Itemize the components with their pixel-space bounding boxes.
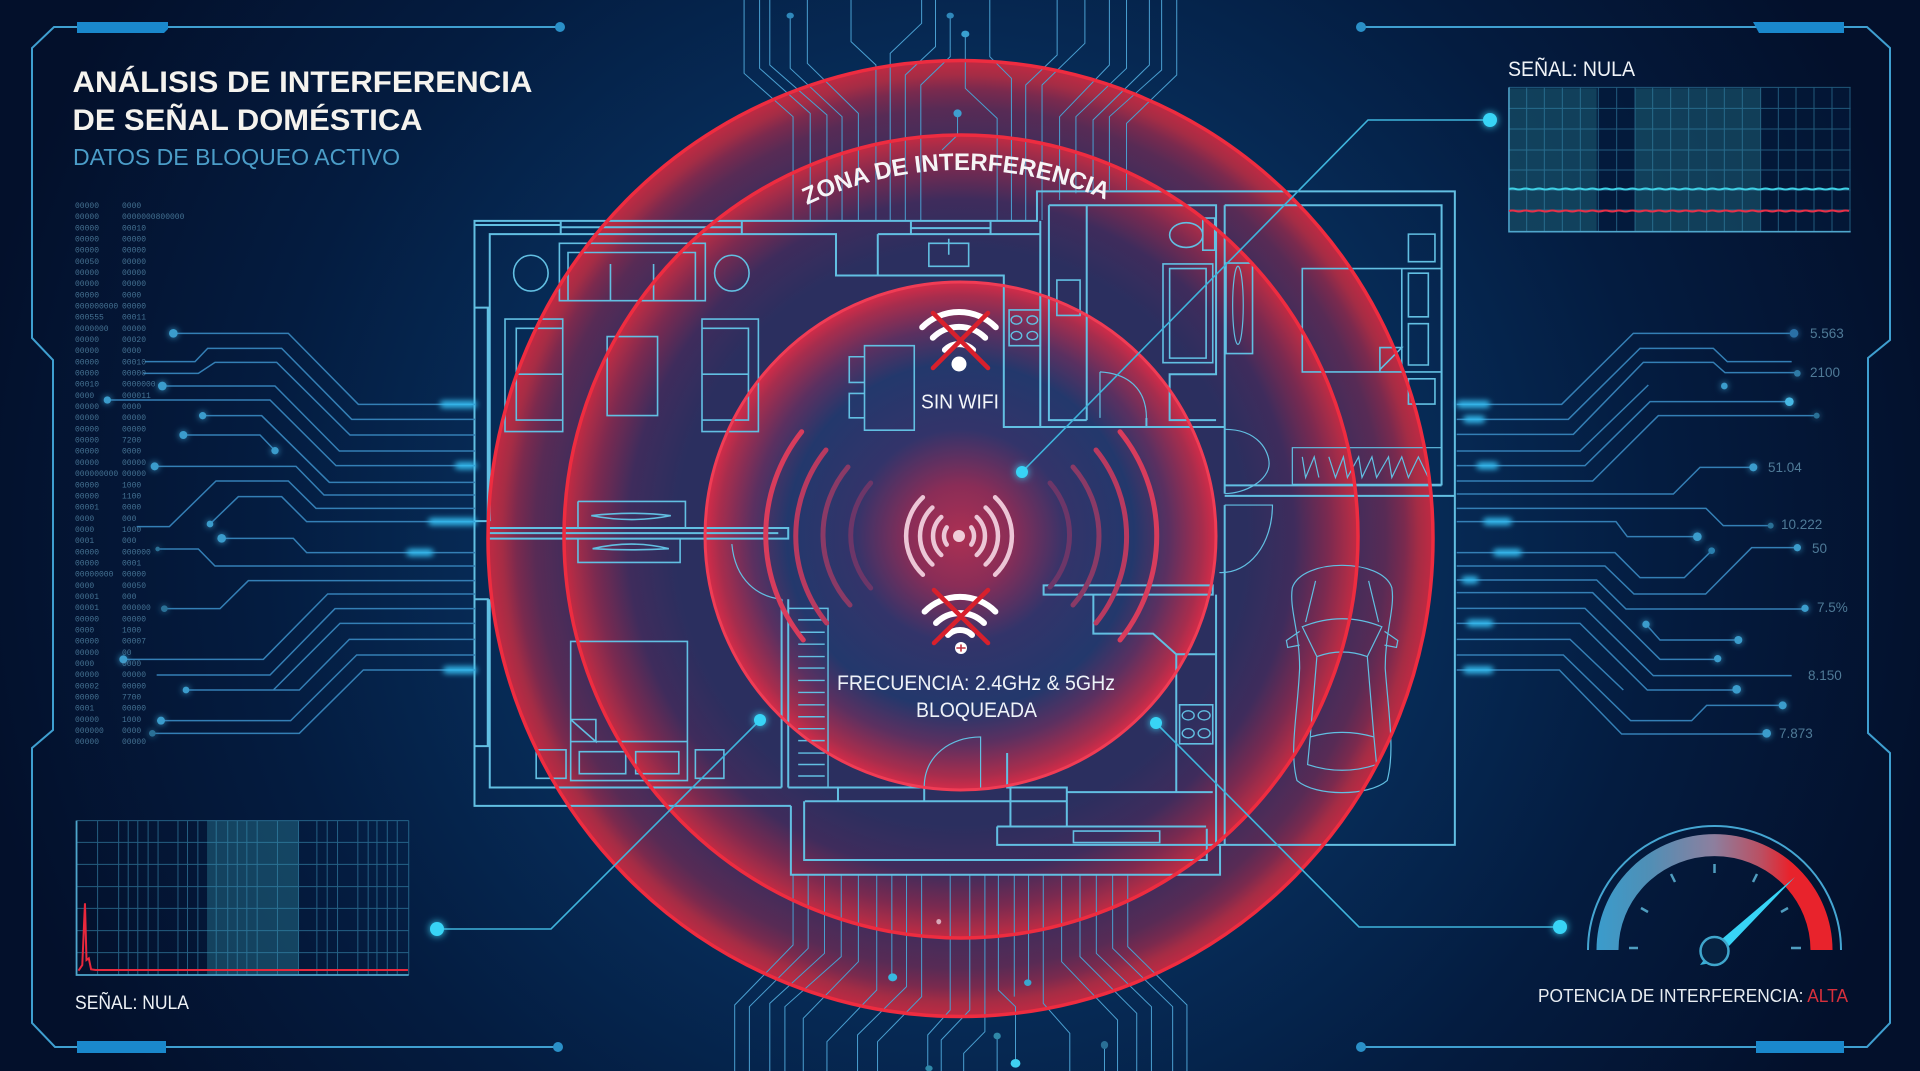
label: zona de interferencia: ZONA DE INTERFERENCIA	[802, 153, 1106, 205]
right trace value labels: 50	[1812, 541, 1827, 556]
right trace value labels: 5.563	[1810, 326, 1844, 341]
data column: right numbers: 00000	[122, 302, 146, 312]
data column: right numbers: 00	[122, 649, 132, 658]
data column: left numbers: 00000	[75, 403, 99, 412]
data column: right numbers: 1000	[122, 526, 141, 535]
data column: right numbers: 0000	[122, 504, 141, 513]
stairs	[788, 608, 828, 787]
data column: left numbers: 000000000	[75, 302, 118, 312]
data column: right numbers: 00000	[122, 414, 146, 423]
chart shaded bands	[1510, 88, 1761, 232]
data column: left numbers: 00000	[75, 492, 99, 501]
label: potencia de interferencia: POTENCIA DE INTERFERENCIA: ALTA	[1538, 986, 1848, 1006]
right trace value labels: 7.5%	[1817, 600, 1848, 615]
living room sofa and lamps	[559, 243, 705, 301]
data column: right numbers: 00000	[122, 247, 146, 256]
gauge outer arc	[1588, 826, 1841, 950]
gauge needle	[1722, 877, 1795, 946]
data column: left numbers: 0001	[75, 537, 94, 546]
kitchen sink	[929, 239, 969, 266]
label: senal nula bottom left: SEÑAL: NULA	[75, 992, 189, 1014]
data column: left numbers: 0000000	[75, 325, 109, 334]
data column: left numbers: 00000000	[75, 571, 114, 580]
data column: right numbers: 00000	[122, 280, 146, 289]
chart axes	[77, 821, 409, 975]
data column: left numbers: 00000	[75, 548, 99, 557]
data column: right numbers: 0000	[122, 403, 141, 412]
data column: right numbers: 0000	[122, 660, 141, 669]
data column: right numbers: 000	[122, 537, 137, 546]
data column: left numbers: 00000	[75, 336, 99, 345]
data column: right numbers: 00000	[122, 258, 146, 267]
floor plan	[474, 191, 1455, 875]
ring outlines	[488, 60, 1433, 1016]
right trace value labels: 8.150	[1808, 668, 1842, 683]
data column: left numbers: 00000	[75, 213, 99, 222]
right trace value labels: 10.222	[1781, 517, 1822, 532]
data column: right numbers: 7700	[122, 694, 141, 702]
data column: right numbers: 00000	[122, 615, 146, 624]
label: frecuencia: BLOQUEADA	[916, 699, 1037, 722]
data column: right numbers: 0000	[122, 727, 141, 736]
data column: left numbers: 00000	[75, 459, 99, 468]
circuit traces: right	[1457, 329, 1820, 738]
data column: right numbers: 00000	[122, 459, 146, 468]
circuit traces: bottom	[735, 875, 1187, 1071]
data column: left numbers: 00001	[75, 504, 99, 513]
chart backdrop	[1509, 87, 1851, 232]
data column: right numbers: 000011	[122, 392, 151, 401]
data column: left numbers: 0000	[75, 626, 94, 636]
data column: left numbers: 00000	[75, 738, 99, 747]
data column: right numbers: 00050	[122, 582, 146, 591]
title	[72, 65, 532, 137]
data column: right numbers: 0000	[122, 347, 141, 356]
right trace value labels: 2100	[1810, 365, 1840, 380]
HUD frame left	[32, 22, 565, 1053]
HUD frame right	[1356, 22, 1890, 1053]
data column: right numbers: 0001	[122, 559, 141, 568]
data column: left numbers: 00000	[75, 414, 99, 423]
shaded band	[207, 821, 299, 974]
data column: right numbers: 0000000	[122, 381, 156, 390]
icon: crossed wifi top	[922, 312, 996, 372]
data column: right numbers: 1000	[122, 626, 141, 636]
data column: right numbers: 00000	[122, 738, 146, 747]
armchairs and coffee table	[505, 319, 758, 432]
data column: left numbers: 00000	[75, 224, 99, 233]
car	[1286, 565, 1398, 793]
data column: left numbers: 000000	[75, 727, 104, 736]
data column: right numbers: 1000	[122, 481, 141, 490]
data column: right numbers: 00007	[122, 638, 146, 647]
data column: left numbers: 00000	[75, 615, 99, 624]
data column: right numbers: 00000	[122, 682, 146, 691]
closet with hangers	[1292, 448, 1442, 484]
chart: signal bottom left	[77, 821, 409, 975]
chart: signal top right	[1509, 87, 1851, 232]
title: DE SEÑAL DOMÉSTICA	[72, 103, 423, 137]
gauge	[1588, 826, 1841, 965]
signal waves	[766, 432, 1157, 640]
data column: left numbers: 00000	[75, 425, 99, 434]
dresser	[578, 501, 685, 562]
label: sin wifi: SIN WIFI	[921, 392, 999, 414]
data column: right numbers: 000000	[122, 604, 151, 613]
data column: left numbers: 0000	[75, 660, 94, 669]
data column: right numbers: 7200	[122, 437, 141, 446]
red trace	[1509, 210, 1849, 211]
bathroom fixtures	[1057, 218, 1253, 363]
data column: right numbers: 00000	[122, 705, 146, 714]
data column: right numbers: 00000	[122, 425, 146, 434]
data column: left numbers: 00050	[75, 258, 99, 267]
cyan trace	[1509, 187, 1849, 190]
bedroom right	[1302, 234, 1442, 404]
bedroom left	[536, 641, 724, 781]
right trace value labels: 7.873	[1779, 726, 1813, 741]
data column: right numbers: 000	[122, 593, 137, 602]
data column: left numbers: 0000	[75, 392, 94, 401]
circuit traces: left	[104, 329, 475, 737]
central signal icon	[906, 497, 1012, 575]
stove	[1009, 310, 1040, 346]
data column: left numbers: 00000	[75, 638, 99, 647]
data column: left numbers: 00002	[75, 682, 99, 691]
right trace value labels: 51.04	[1768, 460, 1802, 475]
data column: left numbers: 0001	[75, 705, 94, 714]
callout lines and hotspots	[430, 113, 1567, 936]
data column: left numbers: 00001	[75, 593, 99, 602]
left trace glows	[410, 404, 473, 670]
data column: right numbers: 00011	[122, 314, 146, 323]
right trace value labels	[1768, 326, 1848, 741]
second stove and bench	[1073, 705, 1213, 843]
data column: left numbers: 00000	[75, 671, 99, 680]
data column: left numbers: 00000	[75, 202, 99, 211]
chart grid	[1509, 87, 1851, 232]
data column: left numbers: 00000	[75, 649, 99, 658]
gauge colored band	[1608, 845, 1822, 950]
plan doors	[732, 372, 1272, 787]
data column: right numbers: 00020	[122, 336, 146, 345]
data column: left numbers: 00000	[75, 448, 99, 457]
data column: right numbers: 0000000800000	[122, 213, 185, 222]
label: frecuencia	[837, 672, 1115, 722]
data column: right numbers: 00010	[122, 224, 146, 233]
data column: right numbers: 1100	[122, 492, 141, 501]
right trace glows	[1460, 404, 1518, 670]
data column: right numbers: 00010	[122, 358, 146, 367]
data column: left numbers: 00000	[75, 694, 99, 702]
data column: left numbers: 00000	[75, 236, 99, 244]
data column: left numbers: 00010	[75, 381, 99, 390]
data column: right numbers: 00000	[122, 325, 146, 334]
data column: left numbers: 00000	[75, 370, 99, 379]
data column: right numbers: 00000	[122, 269, 146, 278]
left trace nodes	[104, 329, 279, 737]
data column: right numbers: 0000	[122, 448, 141, 457]
interference ring fills	[488, 60, 1433, 1016]
data column: left numbers: 00000	[75, 280, 99, 289]
data column: right numbers: 00000	[122, 671, 146, 680]
label: frecuencia: FRECUENCIA: 2.4GHz & 5GHz	[837, 672, 1115, 695]
data column: left numbers: 00000	[75, 481, 99, 490]
data column: left numbers: 000555	[75, 314, 104, 323]
circuit traces: top	[744, 0, 1177, 220]
chart axes	[1509, 87, 1851, 232]
data column: right numbers: 1000	[122, 716, 141, 725]
icon: crossed wifi bottom	[925, 590, 995, 654]
data column: left numbers: 00000	[75, 247, 99, 256]
data column: left numbers: 00000	[75, 437, 99, 446]
data column: left numbers: 000000000	[75, 470, 118, 479]
plan walls	[474, 191, 1455, 875]
right trace nodes	[1642, 329, 1820, 738]
data column: right numbers: 0000	[122, 291, 141, 300]
dining table	[849, 346, 914, 430]
data column: left numbers: 00000	[75, 269, 99, 278]
data column: right numbers: 00000	[122, 571, 146, 580]
data column: left numbers: 0000	[75, 526, 94, 535]
data column: left numbers: 00000	[75, 559, 99, 568]
data column: right numbers: 000	[122, 515, 137, 524]
data column: left numbers: 00000	[75, 716, 99, 725]
title: ANÁLISIS DE INTERFERENCIA	[72, 65, 532, 99]
data column: right numbers: 00000	[122, 236, 146, 244]
data column: left numbers: 0000	[75, 515, 94, 524]
data column: left numbers: 00000	[75, 291, 99, 300]
data column: right numbers: 00000	[122, 470, 146, 479]
data column: right numbers: 00000	[122, 370, 146, 379]
gauge hub	[1700, 937, 1728, 965]
label: senal nula top right: SEÑAL: NULA	[1508, 57, 1635, 81]
data column: right numbers: 000000	[122, 548, 151, 557]
red spike trace	[78, 903, 408, 971]
data column: right numbers: 0000	[122, 202, 141, 211]
subtitle: DATOS DE BLOQUEO ACTIVO	[73, 144, 400, 170]
data column: left numbers: 00000	[75, 347, 99, 356]
data column: left numbers: 0000	[75, 582, 94, 591]
data column: left numbers: 00000	[75, 358, 99, 367]
data column: left numbers: 00001	[75, 604, 99, 613]
chart grid	[77, 821, 409, 975]
gauge ticks	[1629, 864, 1801, 948]
